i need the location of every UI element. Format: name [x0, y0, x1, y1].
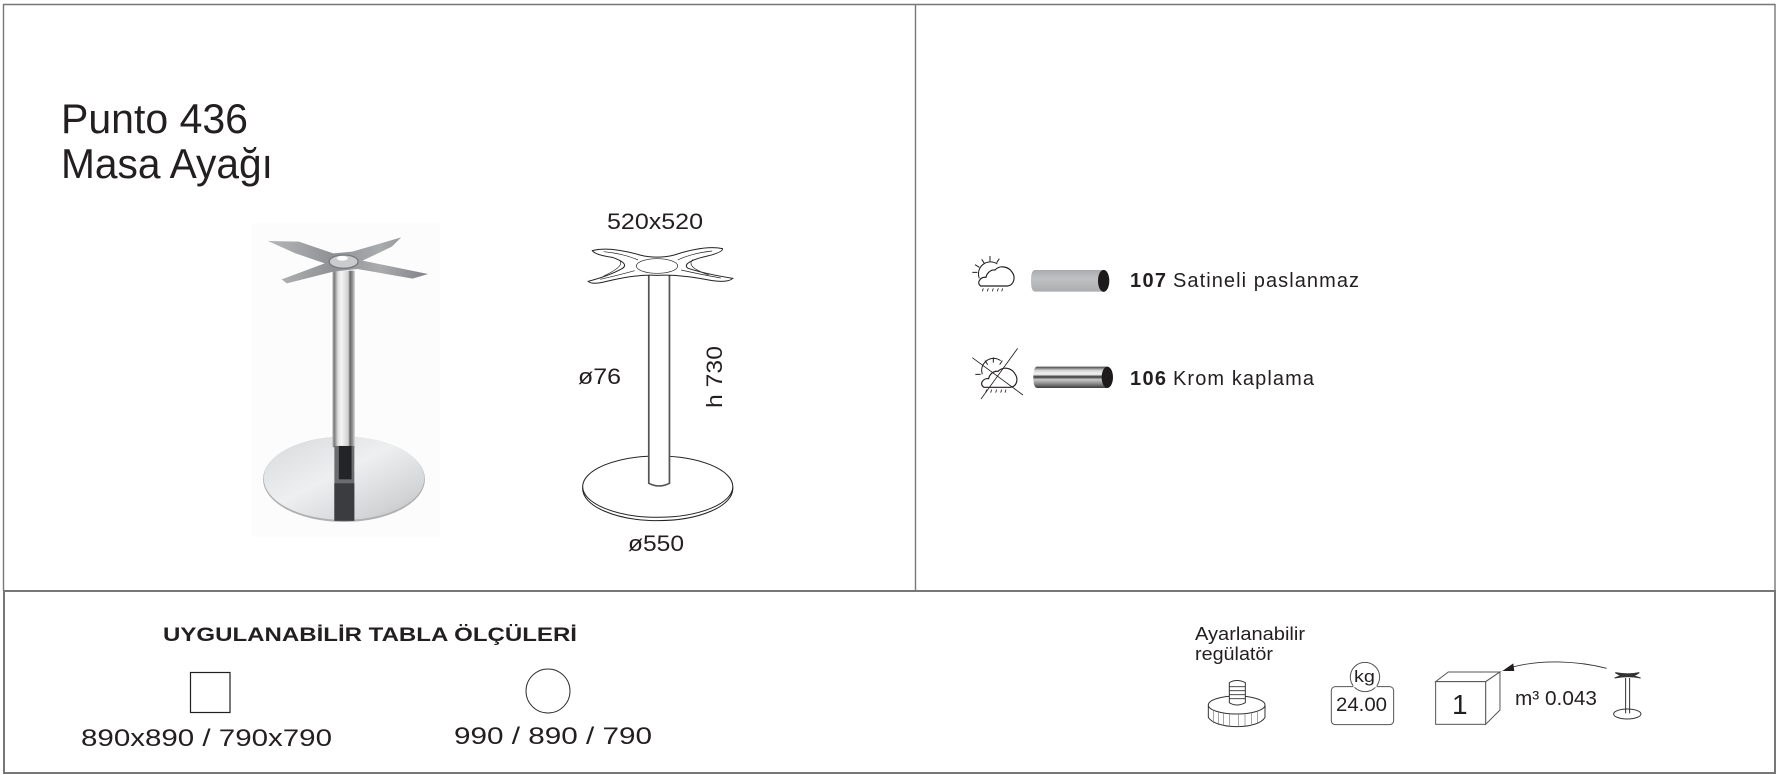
weight text: kg [1354, 667, 1375, 686]
label: adjustable foot: Ayarlanabilir [1195, 624, 1305, 644]
dimension labels [578, 209, 727, 556]
top plate [268, 237, 428, 283]
technical drawing [583, 248, 733, 521]
title [61, 95, 273, 187]
heading: table sizes: UYGULANABİLİR TABLA ÖLÇÜLERİ [163, 625, 577, 646]
box count: 1 [1452, 689, 1468, 720]
title: Punto 436 [61, 95, 248, 142]
dimension labels: ø76 [578, 364, 621, 389]
label: round sizes: 990 / 890 / 790 [454, 723, 652, 750]
top plate outline [588, 248, 733, 283]
icon: square top [190, 672, 230, 712]
column [332, 271, 355, 521]
icon: adjustable foot [1208, 680, 1265, 727]
label: volume: m³ 0.043 [1515, 688, 1597, 710]
arrow [1502, 662, 1607, 671]
label: adjustable foot [1195, 624, 1305, 664]
title: Masa Ayağı [61, 140, 273, 187]
material label: 106: Krom kaplama [1173, 368, 1315, 390]
label: square sizes: 890x890 / 790x790 [81, 725, 332, 752]
product photo: table base [251, 223, 440, 537]
dimension labels: 520x520 [607, 209, 703, 234]
icon: outdoor suitable [972, 256, 1014, 291]
icon: box [1436, 672, 1500, 724]
column outline [649, 273, 669, 486]
material label: 107: 107 [1130, 270, 1166, 292]
cylinder: chrome [1033, 367, 1113, 388]
dimension labels: h 730 [702, 346, 727, 408]
material label: 106: 106 [1130, 368, 1166, 390]
icon: outdoor not suitable [972, 348, 1023, 399]
weight text: 24.00 [1336, 695, 1387, 716]
dimension labels: ø550 [628, 531, 684, 556]
icon: mini table [1614, 673, 1641, 719]
cylinder: satin steel [1031, 270, 1109, 292]
icon: weight tag [1331, 662, 1394, 725]
material label: 107: Satineli paslanmaz [1173, 270, 1359, 292]
base outline [583, 456, 733, 521]
base disc [263, 437, 425, 522]
icon: round top [526, 669, 570, 713]
label: adjustable foot: regülatör [1195, 644, 1273, 664]
weight text [1336, 667, 1387, 716]
